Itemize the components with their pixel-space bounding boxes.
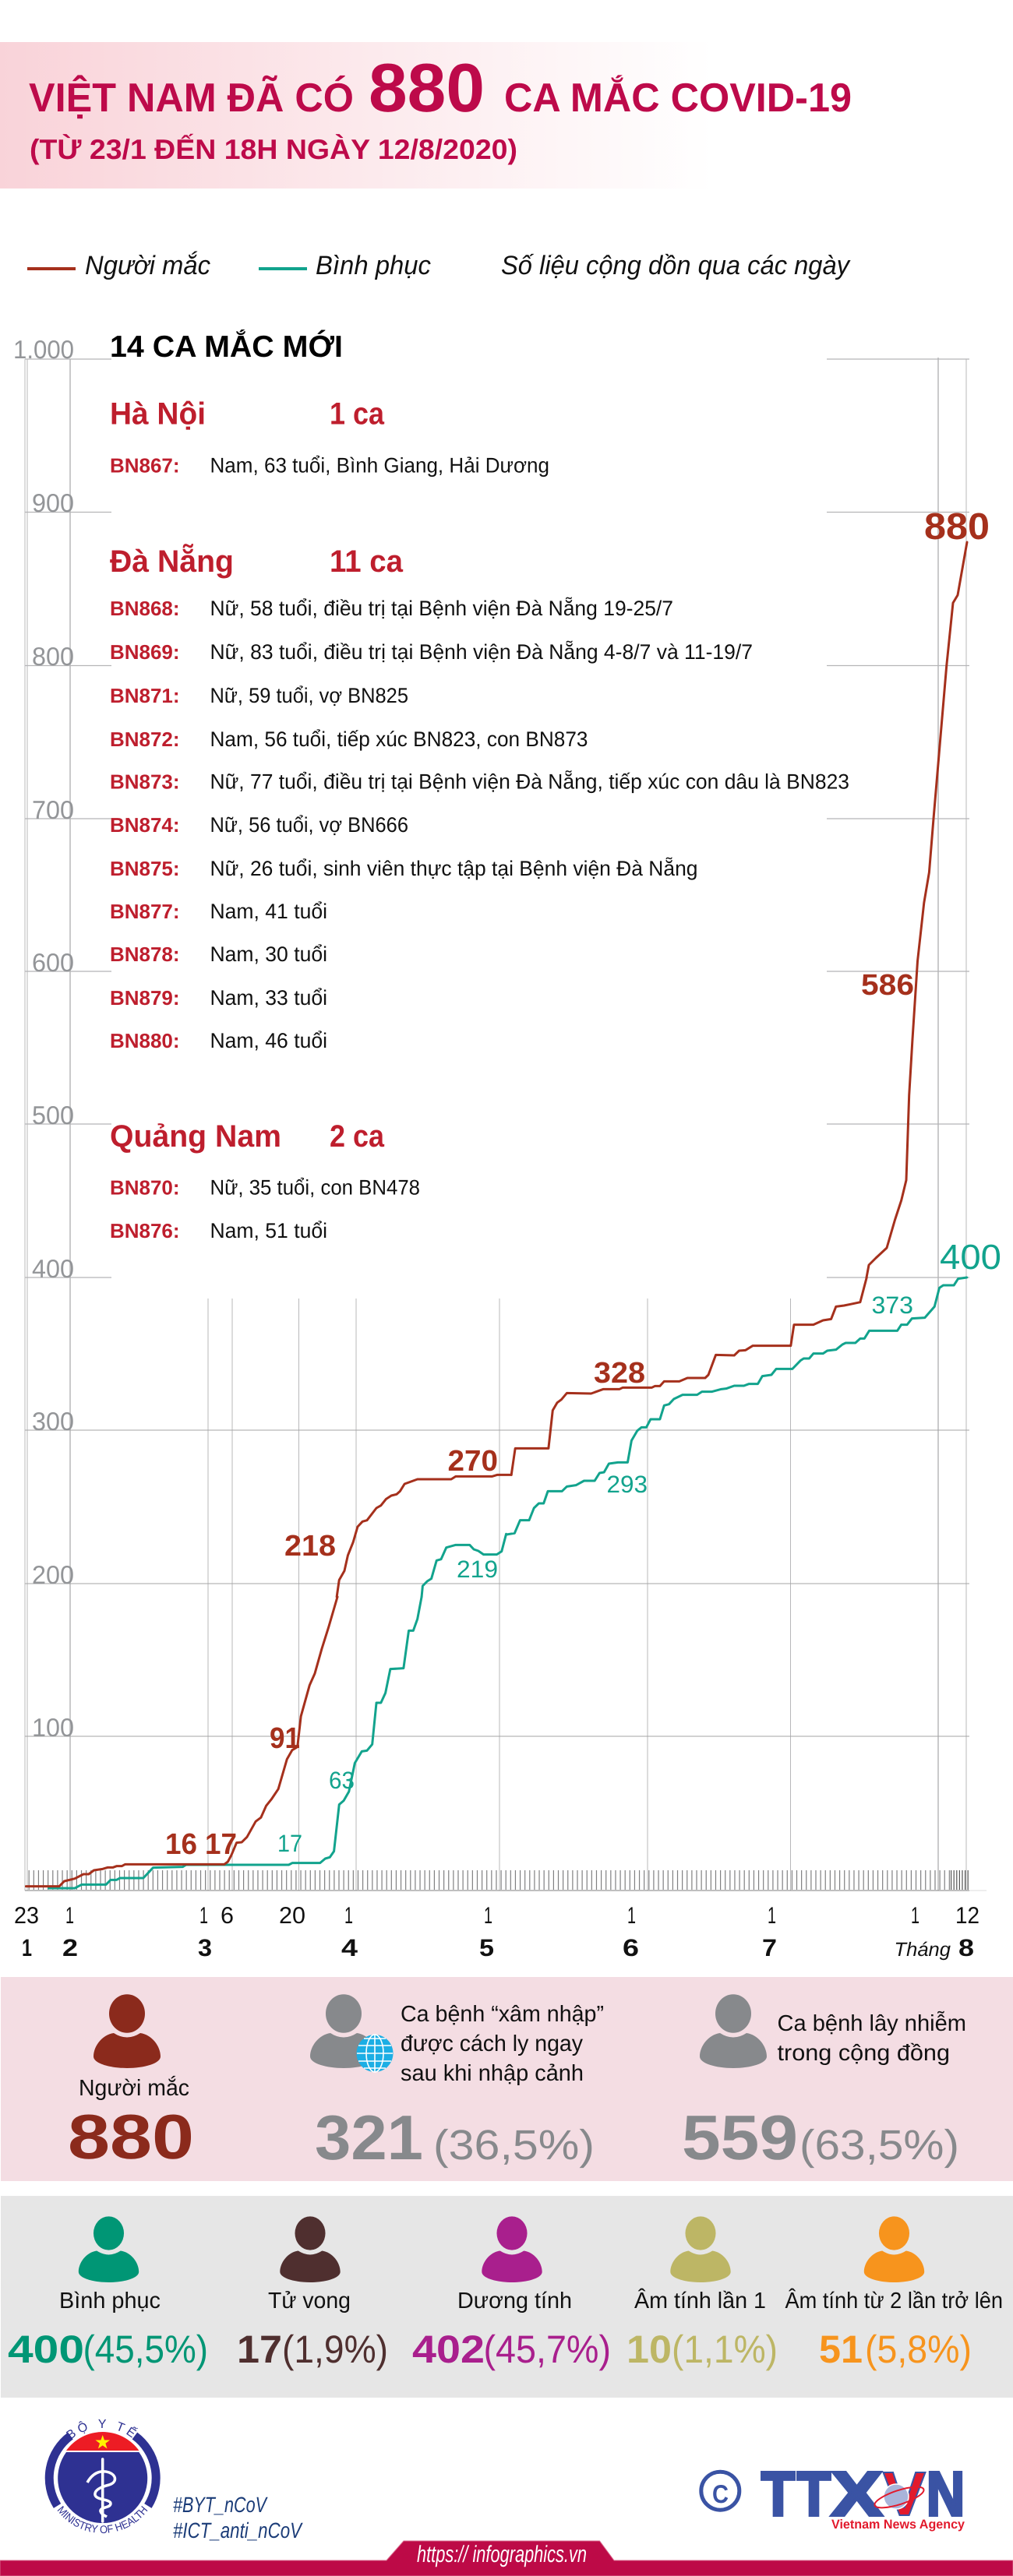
value callouts: recovered: 17	[277, 1830, 302, 1857]
stat: positive: (45,7%)	[483, 2328, 611, 2371]
section: Đà Nẵng: Nữ, 77 tuổi, điều trị tại Bệnh viện Đà Nẵng, tiếp xúc con dâu là BN823	[210, 770, 849, 793]
x axis day labels: 1	[344, 1903, 353, 1929]
section: Đà Nẵng: BN877:	[110, 900, 179, 923]
section: Đà Nẵng: BN874:	[110, 813, 179, 837]
website url: https:// infographics.vn	[417, 2542, 587, 2567]
y axis labels: 700	[32, 795, 74, 824]
x axis day labels	[14, 1903, 979, 1929]
stat: recovered: Bình phục	[59, 2289, 161, 2313]
stat: deaths: Tử vong	[268, 2289, 351, 2313]
x axis day labels: 23	[14, 1903, 39, 1929]
legend	[27, 251, 851, 280]
section: Đà Nẵng: Nữ, 83 tuổi, điều trị tại Bệnh viện Đà Nẵng 4-8/7 và 11-19/7	[210, 640, 753, 664]
icon: person purple	[482, 2216, 542, 2282]
line chart	[13, 335, 1001, 1961]
stat: negative twice or more: (5,8%)	[865, 2328, 972, 2371]
value callouts: recovered: 400	[940, 1237, 1001, 1277]
icon: person khaki	[670, 2216, 731, 2282]
y axis labels	[13, 335, 74, 1742]
section: Đà Nẵng: Nam, 30 tuổi	[210, 943, 327, 966]
stat: imported cases: được cách ly ngay	[401, 2032, 583, 2056]
x axis month labels: 3	[198, 1934, 212, 1961]
stat: positive: Dương tính	[457, 2289, 572, 2313]
stat: deaths: (1,9%)	[282, 2328, 388, 2371]
section: Đà Nẵng: Nam, 41 tuổi	[210, 900, 327, 923]
section: Đà Nẵng: BN878:	[110, 943, 179, 966]
section: Đà Nẵng: Đà Nẵng	[110, 544, 234, 579]
section: Đà Nẵng: Nữ, 56 tuổi, vợ BN666	[210, 813, 408, 837]
value callouts: recovered: 373	[871, 1292, 913, 1319]
section: Quảng Nam: Quảng Nam	[110, 1119, 281, 1154]
logo: TTXVN Vietnam News Agency: N	[927, 2459, 965, 2528]
stat: negative once: Âm tính lần 1	[634, 2288, 766, 2313]
logo: TTXVN Vietnam News Agency: Vietnam News Agency	[831, 2518, 965, 2532]
stat: negative once: (1,1%)	[672, 2328, 778, 2371]
value callouts: confirmed: 218	[284, 1530, 336, 1563]
logo: Ministry of Health	[45, 2419, 161, 2533]
confirmed cases line	[26, 542, 967, 1887]
section: Đà Nẵng: Nam, 33 tuổi	[210, 986, 327, 1010]
stat: recovered: (45,5%)	[83, 2328, 208, 2371]
logo: TTXVN Vietnam News Agency: T	[761, 2459, 795, 2528]
value callouts: confirmed: 16	[165, 1828, 197, 1861]
stat: negative twice or more	[785, 2216, 1003, 2371]
stat: negative twice or more: Âm tính từ 2 lần trở lên	[785, 2288, 1003, 2313]
panel: new cases list	[110, 329, 849, 1242]
hashtags: #ICT_anti_nCoV	[173, 2518, 303, 2543]
value callouts: recovered: 63	[329, 1767, 355, 1794]
stat: imported cases	[310, 1994, 604, 2173]
section: Đà Nẵng: BN869:	[110, 640, 179, 664]
x axis month labels: Tháng	[895, 1939, 951, 1961]
y axis labels: 400	[32, 1254, 74, 1283]
stat: recovered: 400	[8, 2328, 84, 2371]
section: Đà Nẵng: BN880:	[110, 1029, 179, 1052]
stat: negative once: 10	[627, 2328, 672, 2371]
section: Đà Nẵng: Nữ, 59 tuổi, vợ BN825	[210, 684, 408, 707]
section: Hà Nội: 1 ca	[330, 397, 385, 432]
stat: imported cases: Ca bệnh “xâm nhập”	[401, 2002, 604, 2027]
section: Đà Nẵng: BN879:	[110, 986, 179, 1010]
stat: positive: 402	[412, 2328, 485, 2371]
hashtags	[173, 2493, 303, 2543]
y axis labels: 900	[32, 488, 74, 517]
title: VIỆT NAM ĐÃ CÓ	[29, 75, 354, 121]
logo: Ministry of Health: BỘ Y TẾ	[65, 2419, 139, 2438]
section: Quảng Nam: 2 ca	[330, 1119, 385, 1154]
section: Quảng Nam: Nữ, 35 tuổi, con BN478	[210, 1176, 420, 1200]
section: Đà Nẵng: Nam, 46 tuổi	[210, 1029, 327, 1052]
section: Hà Nội: Nam, 63 tuổi, Bình Giang, Hải Dương	[210, 453, 549, 477]
icon: person green	[79, 2216, 139, 2282]
section: Hà Nội	[110, 397, 549, 477]
section: Hà Nội: BN867:	[110, 453, 179, 477]
x axis day labels: 1	[768, 1903, 776, 1929]
value callouts: confirmed: 586	[861, 969, 914, 1002]
footer bar	[0, 2541, 1013, 2576]
section: Đà Nẵng: BN873:	[110, 770, 179, 793]
x axis day labels: 1	[484, 1903, 492, 1929]
x axis day labels: 1	[911, 1903, 919, 1929]
icon: person orange	[864, 2216, 924, 2282]
value callouts: confirmed: 270	[447, 1445, 498, 1478]
hashtags: #BYT_nCoV	[173, 2493, 268, 2517]
legend: Số liệu cộng dồn qua các ngày	[501, 251, 851, 280]
y axis labels: 500	[32, 1101, 74, 1129]
x axis month labels: 7	[762, 1934, 777, 1961]
x axis day labels: 1	[627, 1903, 636, 1929]
x axis day labels: 1	[199, 1903, 208, 1929]
stat: community cases: Ca bệnh lây nhiễm	[778, 2010, 966, 2036]
icon: person brown	[280, 2216, 341, 2282]
section: Đà Nẵng: BN871:	[110, 684, 179, 707]
section: Đà Nẵng: Nữ, 26 tuổi, sinh viên thực tập tại Bệnh viện Đà Nẵng	[210, 857, 698, 880]
panel: patient status summary	[1, 2196, 1013, 2398]
stat: community cases	[682, 1994, 966, 2173]
icon: globe	[357, 2035, 393, 2072]
value callouts: confirmed	[165, 506, 990, 1861]
legend: Người mắc	[85, 251, 210, 280]
stat: community cases: 559	[682, 2103, 798, 2173]
y axis labels: 800	[32, 642, 74, 671]
y axis labels: 100	[32, 1713, 74, 1742]
stat: imported cases: sau khi nhập cảnh	[401, 2061, 584, 2086]
section: Đà Nẵng: BN872:	[110, 728, 179, 751]
section: Quảng Nam: BN870:	[110, 1176, 179, 1200]
x axis day labels: 1	[65, 1903, 74, 1929]
y axis labels: 600	[32, 948, 74, 977]
icon: copyright	[701, 2472, 739, 2510]
y axis labels: 1.000	[13, 335, 74, 364]
section: Đà Nẵng: BN875:	[110, 857, 179, 880]
value callouts: recovered: 293	[606, 1471, 648, 1498]
icon: person grey	[310, 1994, 377, 2068]
x axis month labels	[22, 1934, 974, 1961]
stat: total confirmed: 880	[68, 2102, 194, 2173]
x axis month labels: 8	[958, 1934, 974, 1961]
stat: community cases: trong cộng đồng	[778, 2041, 950, 2066]
icon: copyright: C	[712, 2479, 729, 2508]
section: Quảng Nam: Nam, 51 tuổi	[210, 1219, 327, 1242]
section: Đà Nẵng: Nam, 56 tuổi, tiếp xúc BN823, con BN873	[210, 728, 588, 751]
x axis month labels: 2	[62, 1934, 78, 1961]
stat: negative twice or more: 51	[819, 2328, 863, 2371]
panel: case origin summary	[1, 1977, 1013, 2181]
title	[29, 49, 852, 126]
subtitle: (TỪ 23/1 ĐẾN 18H NGÀY 12/8/2020)	[30, 133, 517, 165]
section: Đà Nẵng: 11 ca	[330, 544, 404, 579]
value callouts: confirmed: 880	[924, 506, 990, 548]
stat: deaths	[237, 2216, 388, 2371]
value callouts: recovered: 219	[457, 1556, 498, 1583]
stat: recovered	[8, 2216, 208, 2371]
stat: total confirmed: Người mắc	[79, 2075, 189, 2101]
x axis day labels: 20	[279, 1903, 305, 1929]
title: CA MẮC COVID-19	[504, 75, 852, 121]
section: Đà Nẵng: BN868:	[110, 597, 179, 620]
stat: negative once	[627, 2216, 778, 2371]
stat: imported cases: (36,5%)	[433, 2122, 595, 2169]
x axis month labels: 5	[479, 1934, 494, 1961]
section: Quảng Nam	[110, 1119, 420, 1242]
value callouts: confirmed: 91	[270, 1722, 300, 1755]
icon: person grey	[700, 1994, 767, 2068]
value callouts: confirmed: 328	[594, 1357, 645, 1390]
legend: Bình phục	[316, 251, 431, 280]
stat: deaths: 17	[237, 2328, 282, 2371]
logo: TTXVN Vietnam News Agency	[701, 2459, 965, 2532]
section: Đà Nẵng: Nữ, 58 tuổi, điều trị tại Bệnh viện Đà Nẵng 19-25/7	[210, 597, 673, 620]
title: 880	[369, 49, 485, 126]
stat: imported cases: 321	[315, 2103, 423, 2173]
section: Đà Nẵng	[110, 544, 849, 1052]
x axis month labels: 1	[22, 1934, 32, 1961]
recovered line	[49, 1277, 967, 1888]
stat: positive	[412, 2216, 611, 2371]
heading: 14 new cases: 14 CA MẮC MỚI	[110, 329, 343, 364]
section: Hà Nội: Hà Nội	[110, 397, 206, 432]
value callouts: confirmed: 17	[205, 1828, 237, 1861]
x axis month labels: 6	[623, 1934, 639, 1961]
header banner	[0, 42, 852, 189]
logo: TTXVN Vietnam News Agency: T	[797, 2459, 831, 2528]
icon: person red	[94, 1994, 161, 2068]
stat: total confirmed	[68, 1994, 194, 2173]
x axis month labels: 4	[341, 1934, 358, 1961]
x axis day labels: 12	[955, 1903, 979, 1929]
section: Quảng Nam: BN876:	[110, 1219, 179, 1242]
x axis day labels: 6	[221, 1903, 234, 1929]
stat: community cases: (63,5%)	[799, 2122, 959, 2169]
logo: TTXVN Vietnam News Agency: V	[883, 2459, 926, 2528]
value callouts: recovered	[277, 1237, 1001, 1857]
y axis labels: 300	[32, 1407, 74, 1436]
logo: Ministry of Health: MINISTRY OF HEALTH	[58, 2506, 148, 2533]
logo: TTXVN Vietnam News Agency: X	[831, 2459, 882, 2528]
y axis labels: 200	[32, 1560, 74, 1589]
